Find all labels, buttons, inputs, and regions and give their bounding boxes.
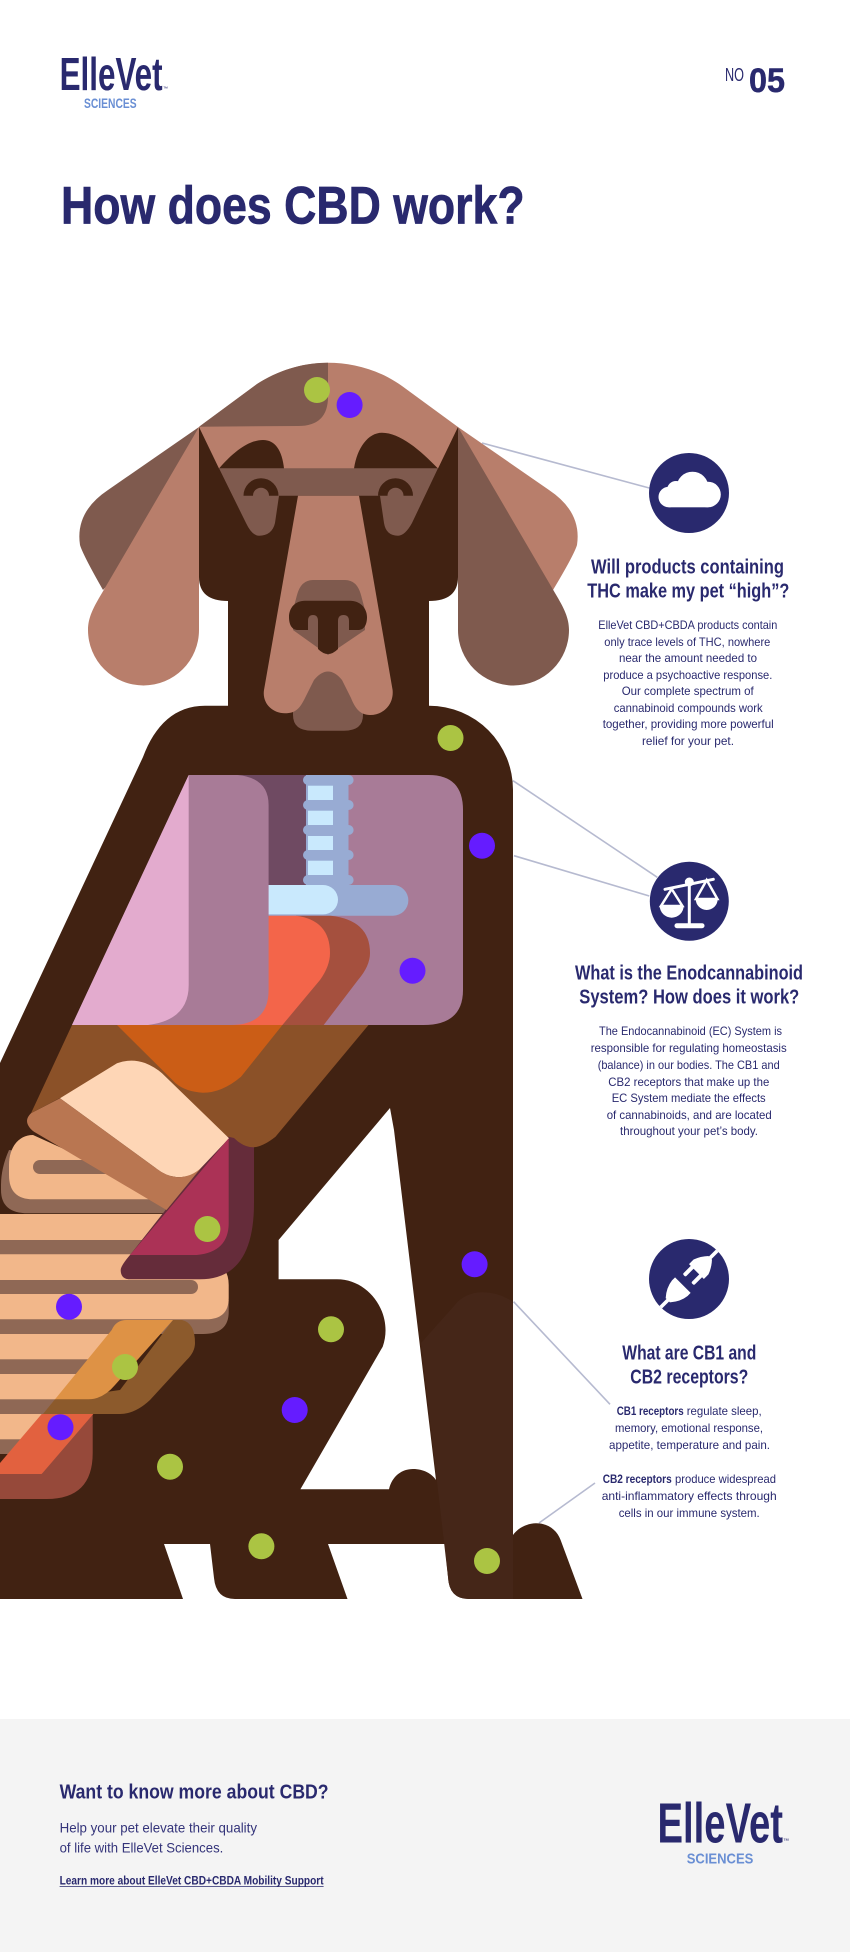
issue number	[725, 62, 785, 100]
footer link: Learn more about ElleVet CBD+CBDA Mobility Support	[60, 1875, 324, 1887]
header logo: ElleVet	[60, 48, 163, 100]
dog muzzle	[264, 496, 393, 715]
footer text: Help your pet elevate their quality	[60, 1820, 257, 1836]
footer logo	[658, 1791, 789, 1867]
body text	[598, 618, 777, 748]
body text: ElleVet CBD+CBDA products contain	[598, 618, 777, 632]
footer text	[60, 1820, 257, 1856]
heading: What are CB1 and	[622, 1342, 756, 1364]
cannabinoid receptor dots: CB2	[112, 377, 500, 1574]
icon: plug	[649, 1239, 729, 1319]
heading: Will products containing	[591, 556, 784, 578]
spine	[303, 775, 354, 890]
body text: Our complete spectrum of	[622, 684, 754, 698]
dog back ears	[79, 427, 578, 590]
cannabinoid receptor dots: CB1	[48, 392, 495, 1440]
footer logo: SCIENCES	[687, 1850, 753, 1867]
heart	[282, 916, 370, 1025]
heading	[622, 1342, 756, 1388]
CB1 text: memory, emotional response,	[615, 1421, 763, 1435]
CB1 text: regulate sleep,	[687, 1404, 762, 1418]
CB1 text	[609, 1404, 770, 1452]
dog chin	[293, 668, 363, 731]
CB2 text: CB2 receptors	[603, 1472, 672, 1486]
body text: relief for your pet.	[642, 734, 734, 748]
body text: CB2 receptors that make up the	[608, 1075, 770, 1089]
body text: together, providing more powerful	[603, 717, 774, 731]
chest cavity: lungs and heart	[72, 775, 463, 1025]
outer lung	[72, 775, 189, 1025]
dog illustration	[0, 363, 582, 1599]
footer logo: ™	[783, 1837, 789, 1844]
heading: THC make my pet “high”?	[587, 581, 789, 603]
header logo: ™	[163, 86, 168, 92]
heading	[587, 556, 789, 603]
lung panel	[72, 775, 463, 1025]
body text: responsible for regulating homeostasis	[591, 1041, 787, 1055]
body text: only trace levels of THC, nowhere	[604, 635, 771, 649]
body text: produce a psychoactive response.	[603, 668, 772, 682]
CB1 text: appetite, temperature and pain.	[609, 1438, 770, 1452]
panel: THC	[587, 453, 789, 748]
behind spine	[237, 775, 307, 885]
inner lung	[148, 775, 269, 1025]
body text: near the amount needed to	[619, 651, 757, 665]
dog forehead	[199, 363, 458, 468]
body text: of cannabinoids, and are located	[607, 1108, 772, 1122]
pancreas	[43, 1320, 195, 1414]
heading	[575, 962, 803, 1008]
lower organ	[0, 1414, 93, 1499]
body text: The Endocannabinoid (EC) System is	[599, 1024, 782, 1038]
issue number: 05	[749, 62, 785, 100]
CB2 text: anti-inflammatory effects through	[602, 1489, 777, 1503]
spleen outer	[121, 1130, 254, 1279]
heading: System? How does it work?	[579, 986, 799, 1008]
heading: CB2 receptors?	[630, 1366, 748, 1388]
body text: (balance) in our bodies. The CB1 and	[598, 1058, 780, 1072]
gap between legs	[279, 1108, 436, 1489]
CB2 text	[602, 1472, 777, 1520]
spleen inner	[130, 1138, 229, 1255]
header logo	[60, 48, 168, 111]
footer panel	[0, 1719, 850, 1952]
title: How does CBD work?	[61, 176, 525, 235]
dog front ears	[88, 427, 569, 686]
footer heading: Want to know more about CBD?	[60, 1780, 329, 1803]
footer logo: ElleVet	[658, 1791, 783, 1855]
dog nose	[289, 580, 367, 655]
body text: throughout your pet’s body.	[620, 1124, 758, 1138]
stomach	[31, 1025, 368, 1147]
icon: cloud	[649, 453, 729, 533]
CB1 text: CB1 receptors	[617, 1404, 684, 1418]
footer text: of life with ElleVet Sciences.	[60, 1840, 223, 1856]
issue number: NO	[725, 65, 744, 85]
dog body silhouette	[0, 427, 582, 1599]
heading: What is the Enodcannabinoid	[575, 962, 803, 984]
dog eyes	[244, 478, 413, 496]
front leg highlight	[421, 1292, 513, 1599]
trachea bar	[268, 885, 408, 916]
connector lines	[482, 443, 657, 1523]
icon: scales	[650, 862, 729, 941]
header logo: SCIENCES	[84, 95, 137, 111]
panel: endocannabinoid system	[575, 862, 803, 1138]
body text: cannabinoid compounds work	[614, 701, 764, 715]
liver upper section	[27, 1061, 229, 1210]
CB2 text: produce widespread	[675, 1472, 776, 1486]
panel: CB1 and CB2 receptors	[602, 1239, 777, 1520]
intestines	[0, 1135, 229, 1454]
dog eye mask	[219, 468, 438, 536]
body text: EC System mediate the effects	[612, 1091, 766, 1105]
CB2 text: cells in our immune system.	[619, 1506, 760, 1520]
body text	[591, 1024, 787, 1138]
